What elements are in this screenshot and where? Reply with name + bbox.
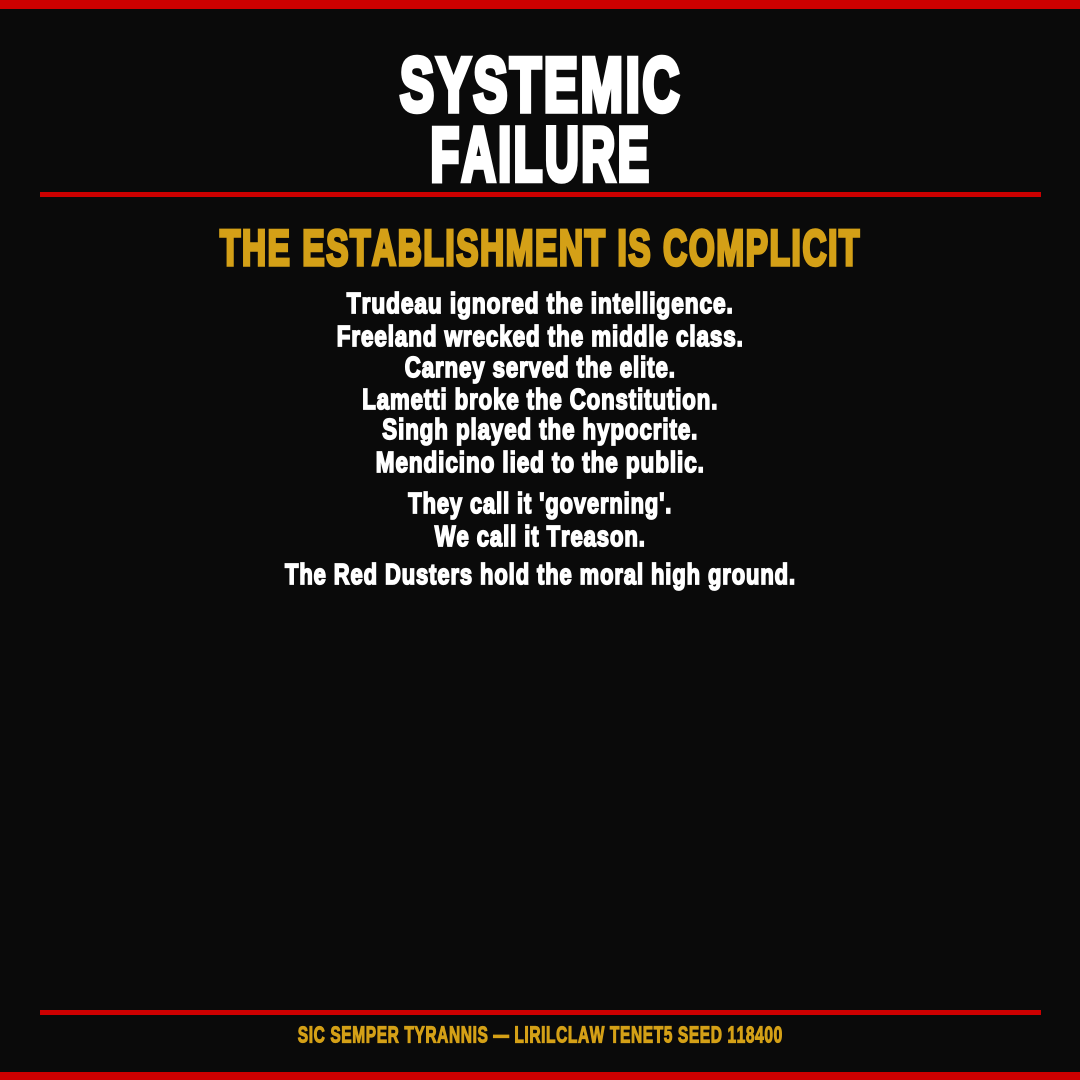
body line 4: Lametti broke the Constitution.	[362, 384, 718, 416]
title	[400, 43, 682, 198]
body line 3: Carney served the elite.	[405, 352, 676, 384]
body line 2: Freeland wrecked the middle class.	[337, 321, 744, 353]
body line 6: Mendicino lied to the public.	[376, 447, 705, 479]
body line 5: Singh played the hypocrite.	[382, 414, 698, 446]
title divider rule	[40, 192, 1041, 197]
bottom red bar	[0, 1072, 1080, 1080]
body line 9: The Red Dusters hold the moral high ground.	[285, 559, 796, 591]
body line 1: Trudeau ignored the intelligence.	[347, 288, 734, 320]
top red bar	[0, 0, 1080, 9]
footer divider rule	[40, 1010, 1041, 1015]
body text block	[285, 288, 796, 591]
footer text: SIC SEMPER TYRANNIS — LIRILCLAW TENET5 SEED 118400	[298, 1022, 783, 1048]
title line: SYSTEMIC: SYSTEMIC	[400, 43, 682, 128]
body line 7: They call it 'governing'.	[408, 488, 672, 520]
title line: FAILURE: FAILURE	[430, 112, 652, 198]
body line 8: We call it Treason.	[435, 521, 646, 553]
